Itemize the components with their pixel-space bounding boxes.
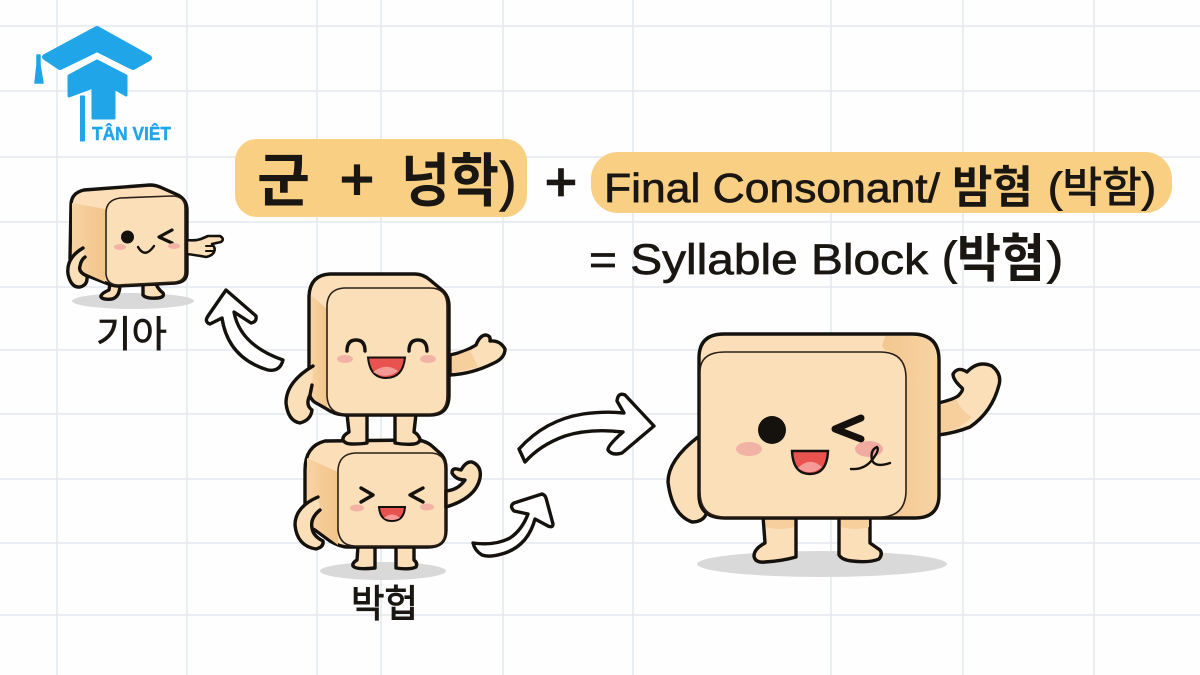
character: bottom stacked block [295,440,480,580]
legs [353,546,417,569]
ground shadow [320,562,446,580]
plus sign between pills: + [545,152,577,212]
face [121,230,134,244]
ground shadow [697,551,947,577]
legs [101,284,163,299]
face [758,416,786,444]
ground shadow [72,293,194,309]
legs [343,414,420,444]
heading pill: first component: 군 [257,149,310,214]
legs [754,516,881,562]
heading pill: final consonant: Final Consonant/ [604,165,941,211]
label: 박헙: 박헙 [351,584,418,626]
heading pill: first component [235,139,527,217]
heading pill: first component: ) [500,152,516,212]
left arm [668,437,707,522]
heading pill: final consonant [591,152,1172,213]
face [347,340,427,351]
body [699,334,939,518]
character: small pointing block [68,185,223,309]
heading pill: first component: 넝학 [401,149,499,214]
heading pill: final consonant: (박함) [1048,164,1156,211]
logo icon: graduation cap and arrow [35,29,149,141]
arms [295,462,480,549]
equation: syllable block: ( [942,232,958,284]
logo: Tan Viet [35,29,171,144]
arrow: upper to large block [519,394,654,462]
arrow: lower to large block [473,494,553,556]
label: 기아: 기아 [96,314,167,355]
logo wordmark: TÂN VIÊT [92,123,171,144]
character: top stacked block [286,274,505,444]
arms [68,236,223,287]
body [70,185,187,286]
arms [286,335,505,423]
heading pill: final consonant: 밤혐 [952,162,1033,213]
arrow: to small block [206,290,283,370]
equation: syllable block: 박혐 [957,231,1045,289]
equation: syllable block: = Syllable Block [589,237,929,284]
equation: syllable block: ) [1047,232,1063,284]
character: large combined block [668,334,1000,577]
heading pill: first component: + [340,147,374,212]
face [361,488,423,502]
right arm [938,364,1000,435]
equation: syllable block [589,231,1063,289]
body [305,440,446,547]
body [309,274,449,415]
